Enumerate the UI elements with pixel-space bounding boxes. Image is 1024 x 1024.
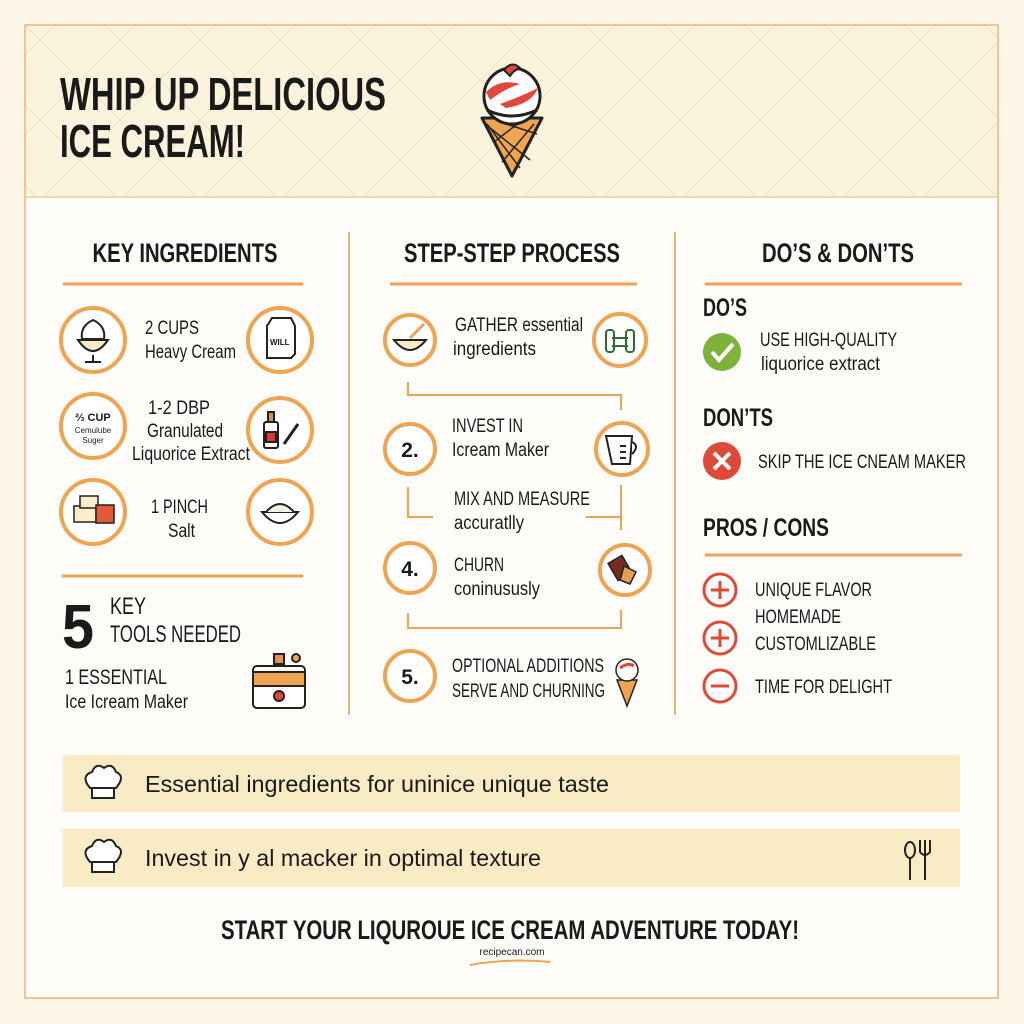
- icon: salt bowl: [262, 504, 298, 523]
- panel: dos and donts: UNIQUE FLAVOR: [755, 580, 872, 601]
- panel: dos and donts: DO’S: [703, 294, 747, 322]
- title: ICE CREAM!: [60, 115, 245, 167]
- banner 2: [63, 829, 960, 887]
- key tools block: Ice Icream Maker: [65, 692, 189, 713]
- key tools block: TOOLS NEEDED: [110, 621, 241, 648]
- panel: dos and donts: CUSTOMLIZABLE: [755, 634, 876, 655]
- sugar label: ⅔ CUP: [75, 412, 111, 424]
- step texts: coninususly: [454, 579, 540, 600]
- panel: step process: 5.: [401, 666, 419, 689]
- footer: START YOUR LIQUROUE ICE CREAM ADVENTURE TODAY!: [221, 915, 799, 945]
- step texts: Icream Maker: [452, 440, 550, 461]
- step texts: INVEST IN: [452, 416, 523, 437]
- panel: dos and donts: USE HIGH-QUALITY: [760, 330, 897, 351]
- title: [60, 68, 386, 167]
- banner 1: Essential ingredients for uninice unique taste: [145, 771, 609, 797]
- panel: dos and donts: HOMEMADE: [755, 607, 841, 628]
- icon: utensils: [606, 330, 634, 352]
- ingredient texts: Salt: [168, 521, 196, 542]
- column dividers: [349, 232, 675, 715]
- footer: [221, 915, 799, 965]
- key tools block: [62, 593, 305, 713]
- icon: extract bottle: [264, 412, 298, 448]
- banner 1: [63, 755, 960, 812]
- icon: whisk bowl: [394, 324, 426, 350]
- key tools block: KEY: [110, 593, 146, 620]
- panel: dos and donts: SKIP THE ICE CNEAM MAKER: [758, 452, 966, 473]
- icon: milk carton: [267, 318, 295, 358]
- header band: [26, 26, 997, 197]
- panel: dos and donts: TIME FOR DELIGHT: [755, 677, 892, 698]
- icon: butter: [74, 496, 114, 523]
- heading: key ingredients: KEY INGREDIENTS: [92, 238, 278, 268]
- ingredient texts: Granulated: [147, 421, 223, 442]
- panel: step process: [385, 238, 650, 706]
- footer: recipecan.com: [479, 947, 545, 958]
- ingredient texts: 1 PINCH: [151, 497, 208, 518]
- icon: chocolate: [608, 555, 636, 584]
- heading: steps: STEP-STEP PROCESS: [404, 238, 620, 268]
- sugar label: [75, 412, 112, 445]
- key tools block: 1 ESSENTIAL: [65, 666, 167, 689]
- ingredient texts: 2 CUPS: [145, 318, 199, 339]
- icon: small cone: [616, 659, 638, 706]
- sugar label: Cemulube: [75, 426, 112, 435]
- icon: ice cream maker: [253, 654, 305, 708]
- icon: cream cup: [78, 320, 108, 362]
- step texts: OPTIONAL ADDITIONS: [452, 656, 604, 677]
- step texts: ingredients: [453, 339, 536, 360]
- step texts: GATHER essential: [455, 315, 583, 336]
- panel: dos and donts: [703, 238, 966, 702]
- panel: dos and donts: liquorice extract: [761, 354, 881, 375]
- banner 2: Invest in y al macker in optimal texture: [145, 845, 541, 871]
- icon: cross: [703, 442, 741, 480]
- step texts: [452, 315, 605, 702]
- ingredient texts: [132, 318, 251, 542]
- heading: dos: DO’S & DON’TS: [762, 238, 914, 268]
- panel: dos and donts: PROS / CONS: [703, 514, 829, 542]
- ingredient texts: 1-2 DBP: [148, 398, 210, 419]
- icon: milk carton: WILL: [270, 338, 290, 347]
- icon: ice cream cone: [482, 64, 542, 176]
- title: WHIP UP DELICIOUS: [60, 68, 386, 120]
- panel: step process: 4.: [401, 558, 419, 581]
- step texts: SERVE AND CHURNING: [452, 681, 605, 702]
- panel: dos and donts: DON’TS: [703, 404, 773, 432]
- icon: measuring cup: [606, 436, 636, 464]
- key tools block: 5: [62, 593, 94, 662]
- icon: spoon and fork: [905, 840, 930, 880]
- step texts: MIX AND MEASURE: [454, 489, 590, 510]
- step texts: CHURN: [454, 555, 504, 576]
- ingredient texts: Liquorice Extract: [132, 444, 251, 465]
- sugar label: Suger: [82, 436, 104, 445]
- icon: check: [703, 333, 741, 371]
- ingredient texts: Heavy Cream: [145, 342, 236, 363]
- step texts: accuratlly: [454, 513, 524, 534]
- panel: key ingredients: [61, 238, 312, 576]
- panel: step process: 2.: [401, 439, 419, 462]
